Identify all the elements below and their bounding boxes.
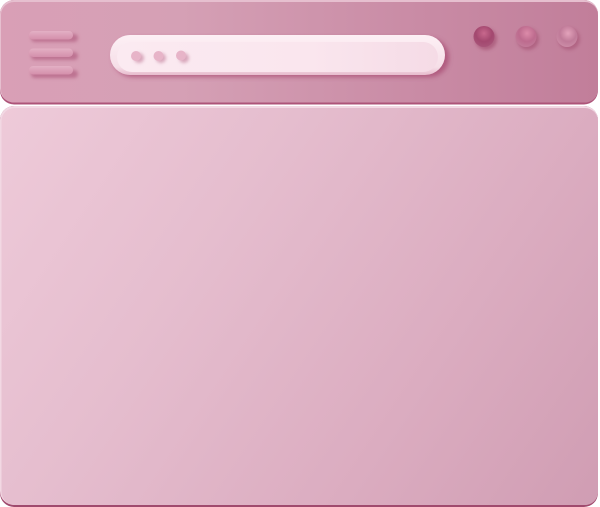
icon: search bar dots xyxy=(131,50,189,63)
panel: top toolbar xyxy=(0,0,598,104)
icon: hamburger menu xyxy=(29,31,78,78)
panel: content area xyxy=(0,106,598,507)
search bar xyxy=(110,35,449,77)
icon: window control buttons xyxy=(474,26,580,50)
